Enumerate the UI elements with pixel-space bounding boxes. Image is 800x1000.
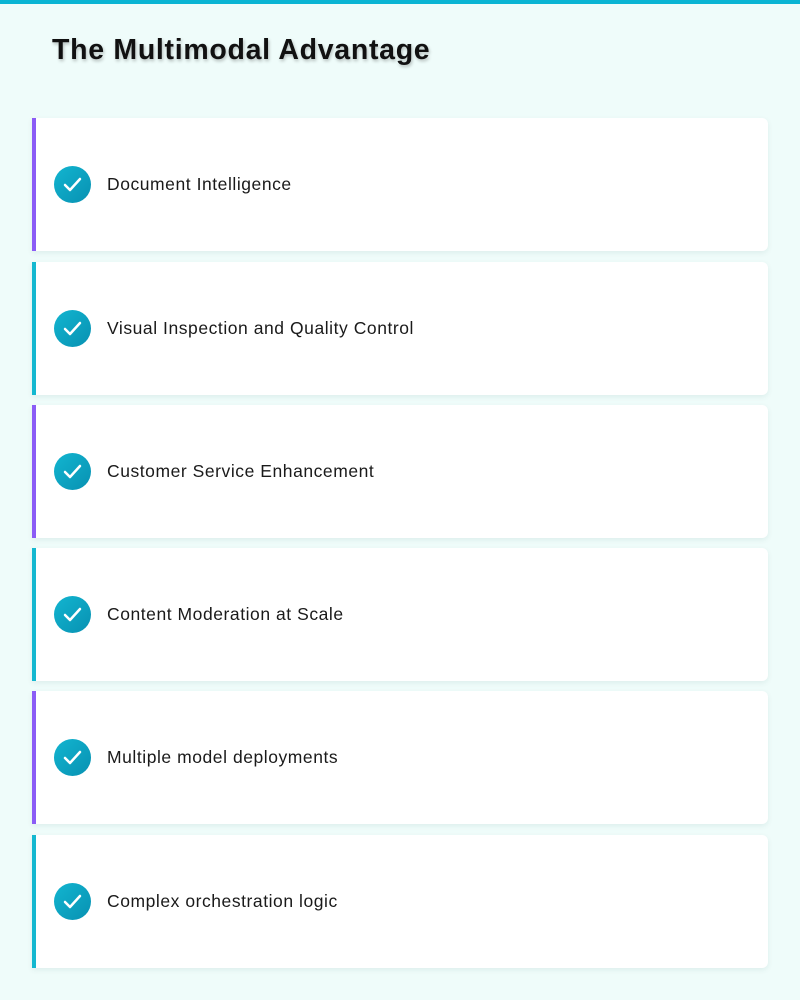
icon: check — [54, 166, 91, 203]
icon: check — [54, 883, 91, 920]
text: Content Moderation at Scale — [107, 604, 344, 624]
text: Document Intelligence — [107, 174, 292, 194]
icon: check — [54, 739, 91, 776]
card: Document Intelligence — [32, 118, 768, 251]
card: Multiple model deployments — [32, 691, 768, 824]
card: Visual Inspection — [32, 262, 768, 395]
card: Complex orchestration — [32, 835, 768, 968]
text: Multiple model deployments — [107, 747, 338, 767]
text: Customer Service Enhancement — [107, 461, 374, 481]
text: Complex orchestration logic — [107, 891, 338, 911]
title: The Multimodal Advantage — [52, 34, 430, 66]
icon: check — [54, 596, 91, 633]
text: Visual Inspection and Quality Control — [107, 318, 414, 338]
card: Customer Service — [32, 405, 768, 538]
icon: check — [54, 453, 91, 490]
icon: check — [54, 310, 91, 347]
card: Content Moderation — [32, 548, 768, 681]
